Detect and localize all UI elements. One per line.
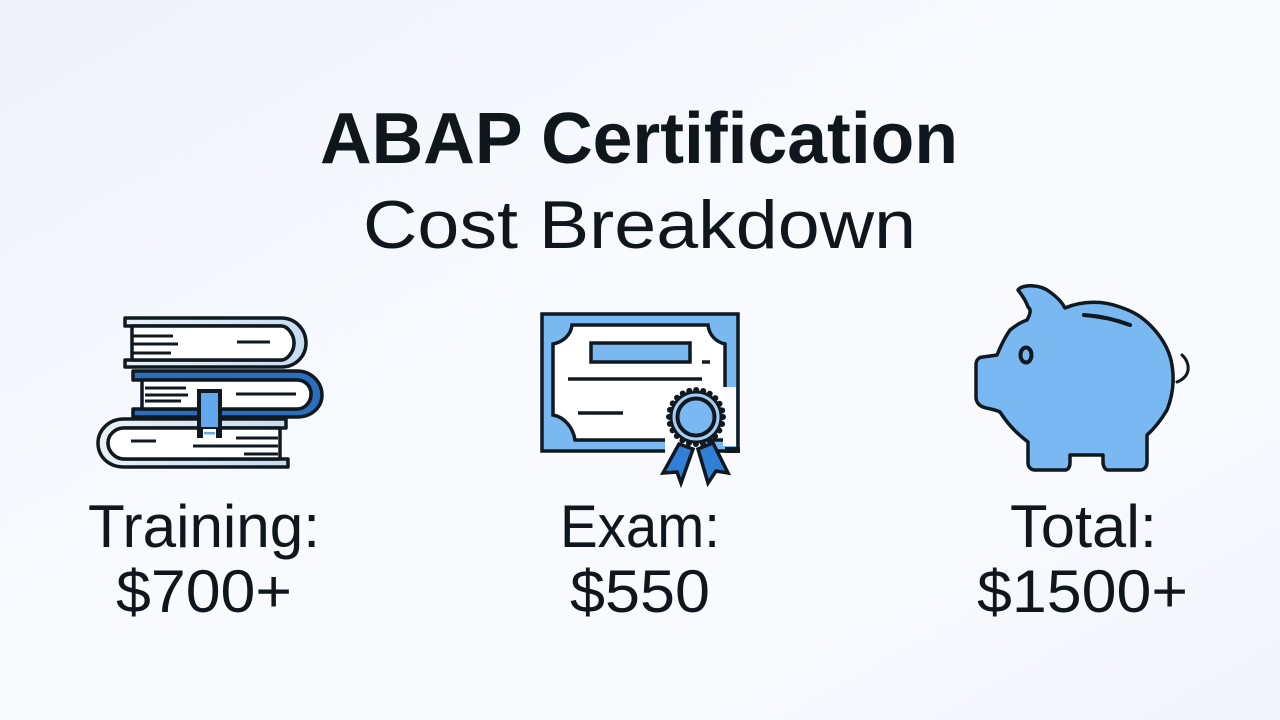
title <box>320 99 958 263</box>
bottom book <box>98 419 288 467</box>
icon: piggy bank <box>976 286 1188 470</box>
label: training <box>88 493 320 625</box>
coin slot <box>1084 315 1130 325</box>
icon: certificate <box>542 314 740 483</box>
exam cost: $550 <box>570 558 710 625</box>
rosette <box>669 390 723 444</box>
pig body <box>976 286 1173 470</box>
pig eye <box>1020 348 1032 362</box>
bookmark <box>197 389 222 438</box>
paper cutout <box>723 387 736 446</box>
label: exam <box>560 493 720 625</box>
title line 1: ABAP Certification <box>320 99 958 179</box>
exam label: Exam: <box>560 493 720 560</box>
certificate frame <box>542 314 738 451</box>
top book <box>125 318 306 367</box>
training label: Training: <box>88 493 320 560</box>
certificate text lines <box>568 362 710 413</box>
ribbon tails <box>663 443 728 483</box>
middle book <box>133 371 322 417</box>
icon: stack of books <box>98 318 322 467</box>
label: total <box>977 493 1188 625</box>
training cost: $700+ <box>116 558 292 625</box>
name plate <box>591 343 690 362</box>
pig tail <box>1177 355 1188 382</box>
certificate paper <box>553 325 725 440</box>
title line 2: Cost Breakdown <box>363 187 916 263</box>
total cost: $1500+ <box>977 558 1188 625</box>
total label: Total: <box>1010 493 1157 560</box>
